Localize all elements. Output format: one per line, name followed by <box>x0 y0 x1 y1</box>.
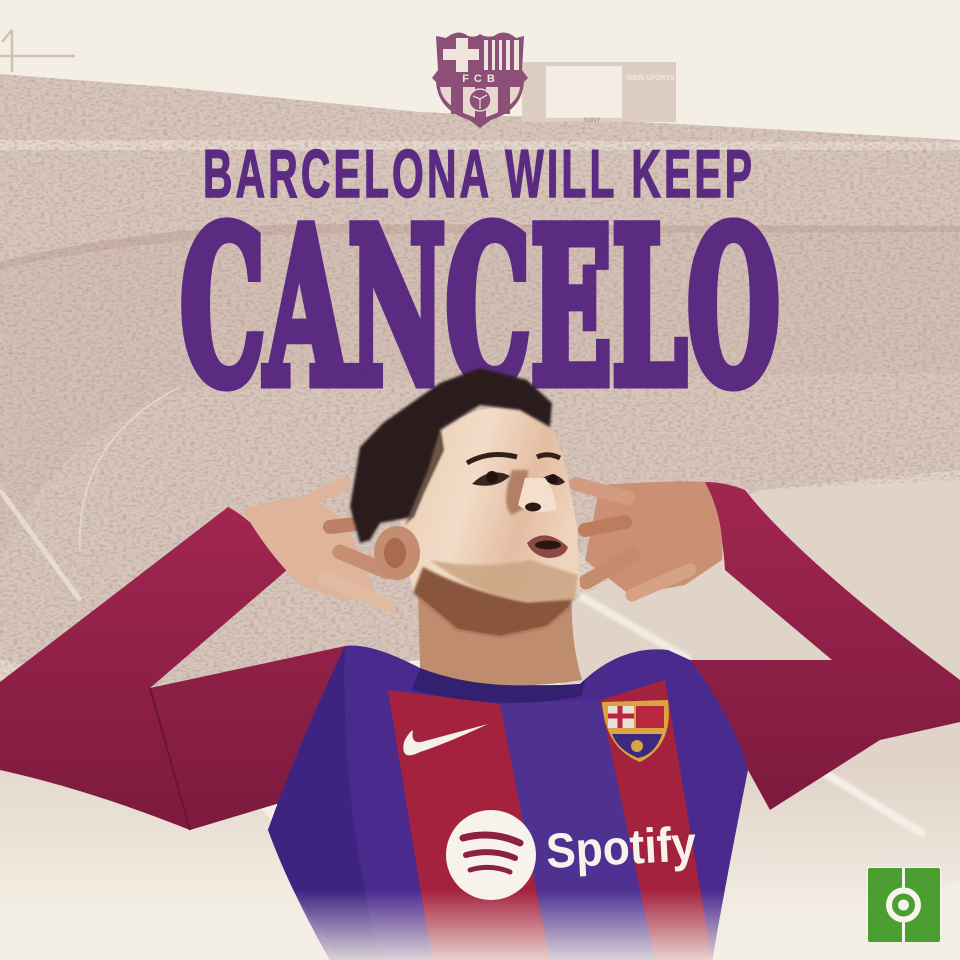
jersey fade <box>296 893 724 960</box>
jersey: Spotify logo <box>446 810 697 900</box>
jersey: Spotify logo: Spotify <box>545 817 697 879</box>
player: left hand <box>243 483 388 606</box>
player: right hand <box>576 481 722 595</box>
jersey: club badge <box>602 700 669 762</box>
player: head <box>350 368 580 637</box>
jersey: Nike swoosh <box>403 724 488 755</box>
heading: Barcelona will keep: BARCELONA WILL KEEP <box>203 135 752 212</box>
player: right arm <box>690 482 960 810</box>
player: neck <box>418 590 582 685</box>
player: jersey <box>260 640 760 960</box>
background: scoreboard: SONY <box>583 118 601 124</box>
logo: BeSoccer <box>867 867 941 942</box>
club crest: FCB <box>432 32 528 128</box>
club crest: FCB: FCB <box>462 73 500 85</box>
player: left arm <box>0 507 345 830</box>
background: scoreboard: BEIN SPORTS <box>627 75 675 82</box>
background: scoreboard <box>522 62 676 124</box>
